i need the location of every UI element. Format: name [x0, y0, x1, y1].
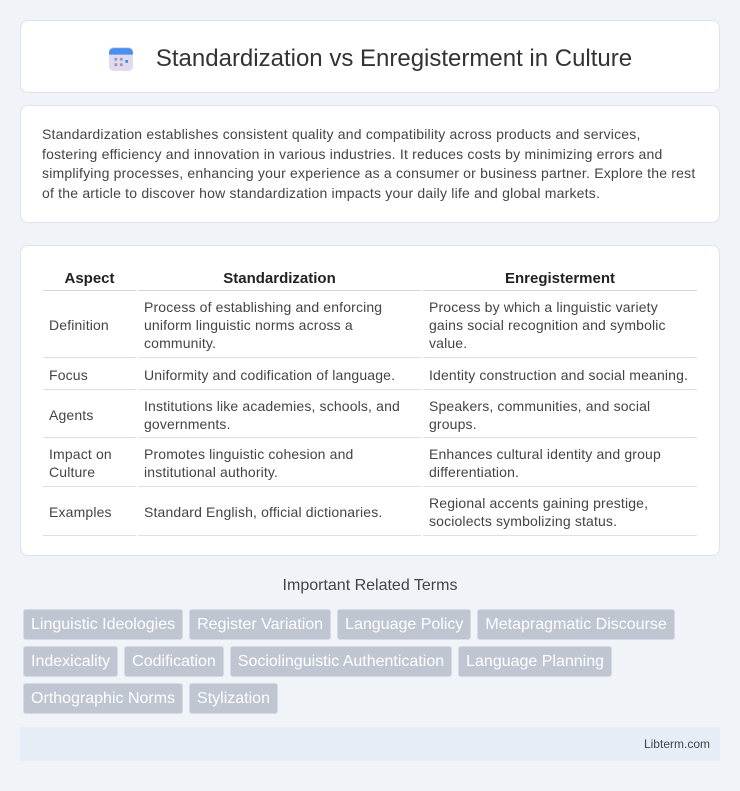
- intro text block: [20, 105, 720, 223]
- related terms tags: Register Variation: [197, 616, 323, 633]
- comparison table panel: Process of establishing and enforcing uniform linguistic norms across a community.: [144, 299, 382, 351]
- related terms tags: Language Planning: [466, 653, 604, 670]
- related terms tags: Linguistic Ideologies: [31, 616, 175, 633]
- icon: calendar: [109, 47, 133, 71]
- related terms tags: Metapragmatic Discourse: [485, 616, 667, 633]
- related terms heading: Important Related Terms: [283, 577, 457, 594]
- comparison table panel: Identity construction and social meaning.: [429, 366, 688, 382]
- comparison table panel: Enhances cultural identity and group differentiation.: [429, 446, 661, 480]
- comparison table panel: Enregisterment: [505, 270, 615, 286]
- comparison table panel: Focus: [49, 366, 88, 382]
- related terms tags: Stylization: [197, 690, 270, 707]
- comparison table panel: Standardization: [223, 270, 336, 286]
- related terms tags: Sociolinguistic Authentication: [238, 653, 444, 670]
- comparison table panel: Speakers, communities, and social groups.: [429, 398, 650, 432]
- header card: [20, 20, 720, 93]
- comparison table panel: Impact on Culture: [49, 446, 112, 480]
- related terms tags: Orthographic Norms: [31, 690, 175, 707]
- comparison table panel: Examples: [49, 504, 112, 520]
- related terms tags: Language Policy: [345, 616, 463, 633]
- comparison table panel: Institutions like academies, schools, and governments.: [144, 398, 400, 432]
- title: Standardization vs Enregisterment in Culture: [156, 44, 632, 72]
- comparison table panel: [20, 245, 720, 556]
- intro text block: Standardization establishes consistent quality and compatibility across products and services, fostering efficiency and innovation in various industries. It reduces costs by minimizing errors and simplifying processes, enhancing your experience as a consumer or business partner. Explore the rest of the article to discover how standardization impacts your daily life and global markets.: [42, 126, 695, 200]
- comparison table panel: Regional accents gaining prestige, sociolects symbolizing status.: [429, 495, 648, 529]
- footer: Libterm.com: [644, 737, 710, 751]
- comparison table panel: Uniformity and codification of language.: [144, 366, 395, 382]
- related terms tags: Indexicality: [31, 653, 110, 670]
- comparison table panel: Agents: [49, 406, 94, 422]
- comparison table panel: Definition: [49, 317, 109, 333]
- comparison table panel: Standard English, official dictionaries.: [144, 504, 382, 520]
- footer: [20, 727, 720, 761]
- comparison table panel: Aspect: [64, 270, 115, 286]
- related terms tags: Codification: [132, 653, 216, 670]
- related terms tags: [23, 609, 675, 714]
- comparison table panel: Process by which a linguistic variety gains social recognition and symbolic value.: [429, 299, 666, 351]
- comparison table panel: Promotes linguistic cohesion and institutional authority.: [144, 446, 353, 480]
